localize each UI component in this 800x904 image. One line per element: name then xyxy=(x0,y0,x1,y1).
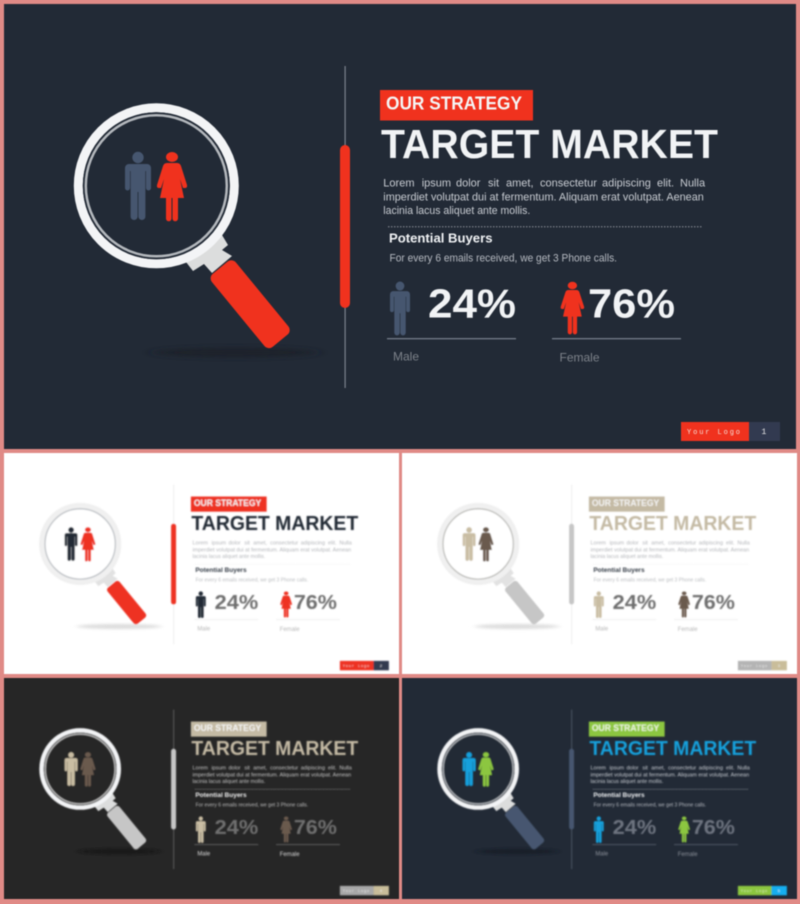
text block: description: amet, xyxy=(651,540,665,546)
stat: male: 24% xyxy=(215,817,258,839)
text block: description: amet, xyxy=(506,178,534,190)
icon: woman in lens xyxy=(80,527,95,562)
text block: description: Nulla xyxy=(339,540,353,546)
text block: description: amet, xyxy=(253,540,267,546)
text block: description: amet, xyxy=(651,765,665,771)
accent bar xyxy=(340,145,350,308)
text block: description: lacinia lacus aliquet ante mollis. xyxy=(193,554,266,560)
tag: our strategy: OUR STRATEGY xyxy=(592,498,659,508)
footer: logo and page number: Your Logo xyxy=(343,665,369,669)
stat: female xyxy=(674,816,738,858)
text block: description: elit. xyxy=(328,765,337,771)
stat: male: 24% xyxy=(428,280,516,326)
footer: logo and page number xyxy=(340,661,389,670)
stat: female: 76% xyxy=(588,280,675,326)
text block: description: imperdiet volutpat dui at fermentum. Aliquam erat volutpat. Aenean xyxy=(193,772,351,778)
text block: description: sit xyxy=(244,765,250,771)
text block: description: Nulla xyxy=(339,765,353,771)
stat: female: 76% xyxy=(692,592,735,614)
footer: logo and page number: 2 xyxy=(380,665,383,669)
icon: magnifying glass xyxy=(440,506,545,626)
text block: description: ipsum xyxy=(212,540,227,546)
panel: white slide, red theme xyxy=(4,453,399,674)
text block: description: elit. xyxy=(726,765,735,771)
text block: description: consectetur xyxy=(668,540,696,546)
stat: male: 24% xyxy=(613,817,656,839)
text block: description: elit. xyxy=(657,178,674,190)
magnifier shadow xyxy=(79,849,160,854)
icon: woman in lens xyxy=(478,752,493,787)
footer: logo and page number: 5 xyxy=(778,890,781,894)
text block: description: ipsum xyxy=(422,178,451,190)
text block: description: adipiscing xyxy=(301,765,325,771)
text block: description: consectetur xyxy=(270,540,298,546)
text block: description: Lorem xyxy=(193,540,208,546)
stat: male: 24% xyxy=(215,592,258,614)
accent bar xyxy=(171,749,176,829)
text block: description: imperdiet volutpat dui at fermentum. Aliquam erat volutpat. Aenean xyxy=(591,547,749,553)
text block: description: lacinia lacus aliquet ante mollis. xyxy=(591,554,664,560)
title: TARGET MARKET xyxy=(191,738,359,760)
footer: logo and page number: 4 xyxy=(380,890,383,894)
stat: female: Female xyxy=(280,852,300,858)
text block: description: imperdiet volutpat dui at fermentum. Aliquam erat volutpat. Aenean xyxy=(383,192,704,204)
stat: male: 24% xyxy=(613,592,656,614)
tag: our strategy: OUR STRATEGY xyxy=(194,723,261,733)
footer: logo and page number: Your Logo xyxy=(343,890,369,894)
text block: description: dolor xyxy=(456,178,481,190)
magnifier shadow xyxy=(475,624,559,629)
stat: male xyxy=(194,816,258,858)
icon: magnifying glass xyxy=(78,108,292,351)
text block: description: ipsum xyxy=(610,540,625,546)
text block: description: elit. xyxy=(726,540,735,546)
icon: magnifying glass xyxy=(440,730,545,851)
text block: description: dolor xyxy=(229,540,241,546)
footer: logo and page number xyxy=(738,661,787,670)
stat: female: 76% xyxy=(294,592,337,614)
footer: logo and page number: 3 xyxy=(778,665,781,669)
text block: description: amet, xyxy=(253,765,267,771)
text block: description: ipsum xyxy=(610,765,625,771)
text block: description: lacinia lacus aliquet ante mollis. xyxy=(383,205,530,217)
magnifier shadow xyxy=(77,624,161,629)
heading: potential buyers: Potential Buyers xyxy=(389,231,492,246)
text block: description: dolor xyxy=(627,540,639,546)
footer: logo and page number: Your Logo xyxy=(687,429,740,437)
text: emails note: For every 6 emails received, we get 3 Phone calls. xyxy=(594,803,707,809)
text block: description: Nulla xyxy=(737,540,751,546)
text block: description: dolor xyxy=(627,765,639,771)
text block: description xyxy=(591,765,751,785)
text block: description: adipiscing xyxy=(699,765,723,771)
text block: description: Lorem xyxy=(193,765,208,771)
divider line xyxy=(570,710,573,869)
title: TARGET MARKET xyxy=(589,513,757,535)
icon: man in lens xyxy=(463,527,476,561)
icon: man in lens xyxy=(463,752,476,786)
text: emails note: For every 6 emails received, we get 3 Phone calls. xyxy=(594,578,707,584)
stat: male: Male xyxy=(197,627,211,633)
magnifier shadow xyxy=(153,348,317,358)
divider line xyxy=(344,66,346,388)
tag: our strategy xyxy=(589,497,665,512)
divider line xyxy=(172,485,175,644)
text block: description: adipiscing xyxy=(602,178,651,190)
tag: our strategy: OUR STRATEGY xyxy=(194,498,261,508)
tag: our strategy xyxy=(191,722,267,737)
icon: woman in lens xyxy=(157,152,187,221)
accent bar xyxy=(171,524,176,604)
icon: magnifying glass xyxy=(42,506,147,626)
text block: description: adipiscing xyxy=(699,540,723,546)
icon: man in lens xyxy=(65,527,78,561)
stat: male: Male xyxy=(197,852,211,858)
footer: logo and page number xyxy=(340,886,389,895)
stat: female: Female xyxy=(280,627,300,633)
stat: female: Female xyxy=(678,627,698,633)
accent bar xyxy=(569,524,574,604)
title: TARGET MARKET xyxy=(381,121,718,167)
stat: male xyxy=(194,591,258,633)
text block: description: sit xyxy=(642,765,648,771)
text block: description: consectetur xyxy=(540,178,597,190)
heading: potential buyers: Potential Buyers xyxy=(593,567,645,574)
heading: potential buyers: Potential Buyers xyxy=(195,792,247,799)
stat: female xyxy=(276,816,340,858)
stat: female: Female xyxy=(560,350,600,364)
panel: main dark slide xyxy=(4,4,796,449)
text block: description: lacinia lacus aliquet ante mollis. xyxy=(591,779,664,785)
text block: description: elit. xyxy=(328,540,337,546)
stat: female: Female xyxy=(678,852,698,858)
text block: description: sit xyxy=(244,540,250,546)
tag: our strategy: OUR STRATEGY xyxy=(592,723,659,733)
text block: description xyxy=(193,765,353,785)
panel: charcoal slide, tan theme xyxy=(4,678,399,899)
stat: female xyxy=(674,591,738,633)
footer: logo and page number: Your Logo xyxy=(741,665,767,669)
panel: white slide, tan theme xyxy=(402,453,797,674)
title: TARGET MARKET xyxy=(589,738,757,760)
heading: potential buyers: Potential Buyers xyxy=(593,792,645,799)
tag: our strategy: OUR STRATEGY xyxy=(386,94,522,114)
divider line xyxy=(172,710,175,869)
stat: female xyxy=(276,591,340,633)
stat: male: Male xyxy=(393,350,419,364)
text block: description: consectetur xyxy=(270,765,298,771)
text block: description: adipiscing xyxy=(301,540,325,546)
icon: man in lens xyxy=(125,152,151,220)
text: emails note: For every 6 emails received, we get 3 Phone calls. xyxy=(390,253,617,265)
text block: description: lacinia lacus aliquet ante mollis. xyxy=(193,779,266,785)
stat: male xyxy=(592,591,656,633)
stat: female: 76% xyxy=(294,817,337,839)
divider line xyxy=(570,485,573,644)
text block: description: imperdiet volutpat dui at fermentum. Aliquam erat volutpat. Aenean xyxy=(591,772,749,778)
stat: male xyxy=(387,280,516,364)
footer: logo and page number: Your Logo xyxy=(741,890,767,894)
tag: our strategy xyxy=(380,90,533,120)
heading: potential buyers: Potential Buyers xyxy=(195,567,247,574)
text block: description: Nulla xyxy=(680,178,706,190)
footer: logo and page number xyxy=(738,886,787,895)
tag: our strategy xyxy=(191,497,267,512)
panel: navy slide, blue and green theme xyxy=(402,678,797,899)
icon: magnifying glass xyxy=(42,730,147,851)
magnifier shadow xyxy=(477,849,558,854)
text block: description: consectetur xyxy=(668,765,696,771)
tag: our strategy xyxy=(589,722,665,737)
text block: description: Lorem xyxy=(591,540,606,546)
text block: description xyxy=(383,178,706,217)
text: emails note: For every 6 emails received, we get 3 Phone calls. xyxy=(196,578,309,584)
stat: female xyxy=(552,280,681,364)
stat: male xyxy=(592,816,656,858)
title: TARGET MARKET xyxy=(191,513,359,535)
text block: description: dolor xyxy=(229,765,241,771)
stat: male: Male xyxy=(595,852,609,858)
stat: male: Male xyxy=(595,627,609,633)
stat: female: 76% xyxy=(692,817,735,839)
icon: man in lens xyxy=(65,752,78,786)
text block: description: Nulla xyxy=(737,765,751,771)
icon: woman in lens xyxy=(478,527,493,562)
text block: description: Lorem xyxy=(591,765,606,771)
text block: description: Lorem xyxy=(383,178,414,190)
text block: description: ipsum xyxy=(212,765,227,771)
text: emails note: For every 6 emails received, we get 3 Phone calls. xyxy=(196,803,309,809)
text block: description xyxy=(193,540,353,560)
text block: description: sit xyxy=(488,178,499,190)
text block: description: sit xyxy=(642,540,648,546)
icon: woman in lens xyxy=(80,752,95,787)
footer: logo and page number: 1 xyxy=(762,428,766,437)
text block: description xyxy=(591,540,751,560)
footer: logo and page number xyxy=(681,422,780,441)
text block: description: imperdiet volutpat dui at fermentum. Aliquam erat volutpat. Aenean xyxy=(193,547,351,553)
accent bar xyxy=(569,749,574,829)
